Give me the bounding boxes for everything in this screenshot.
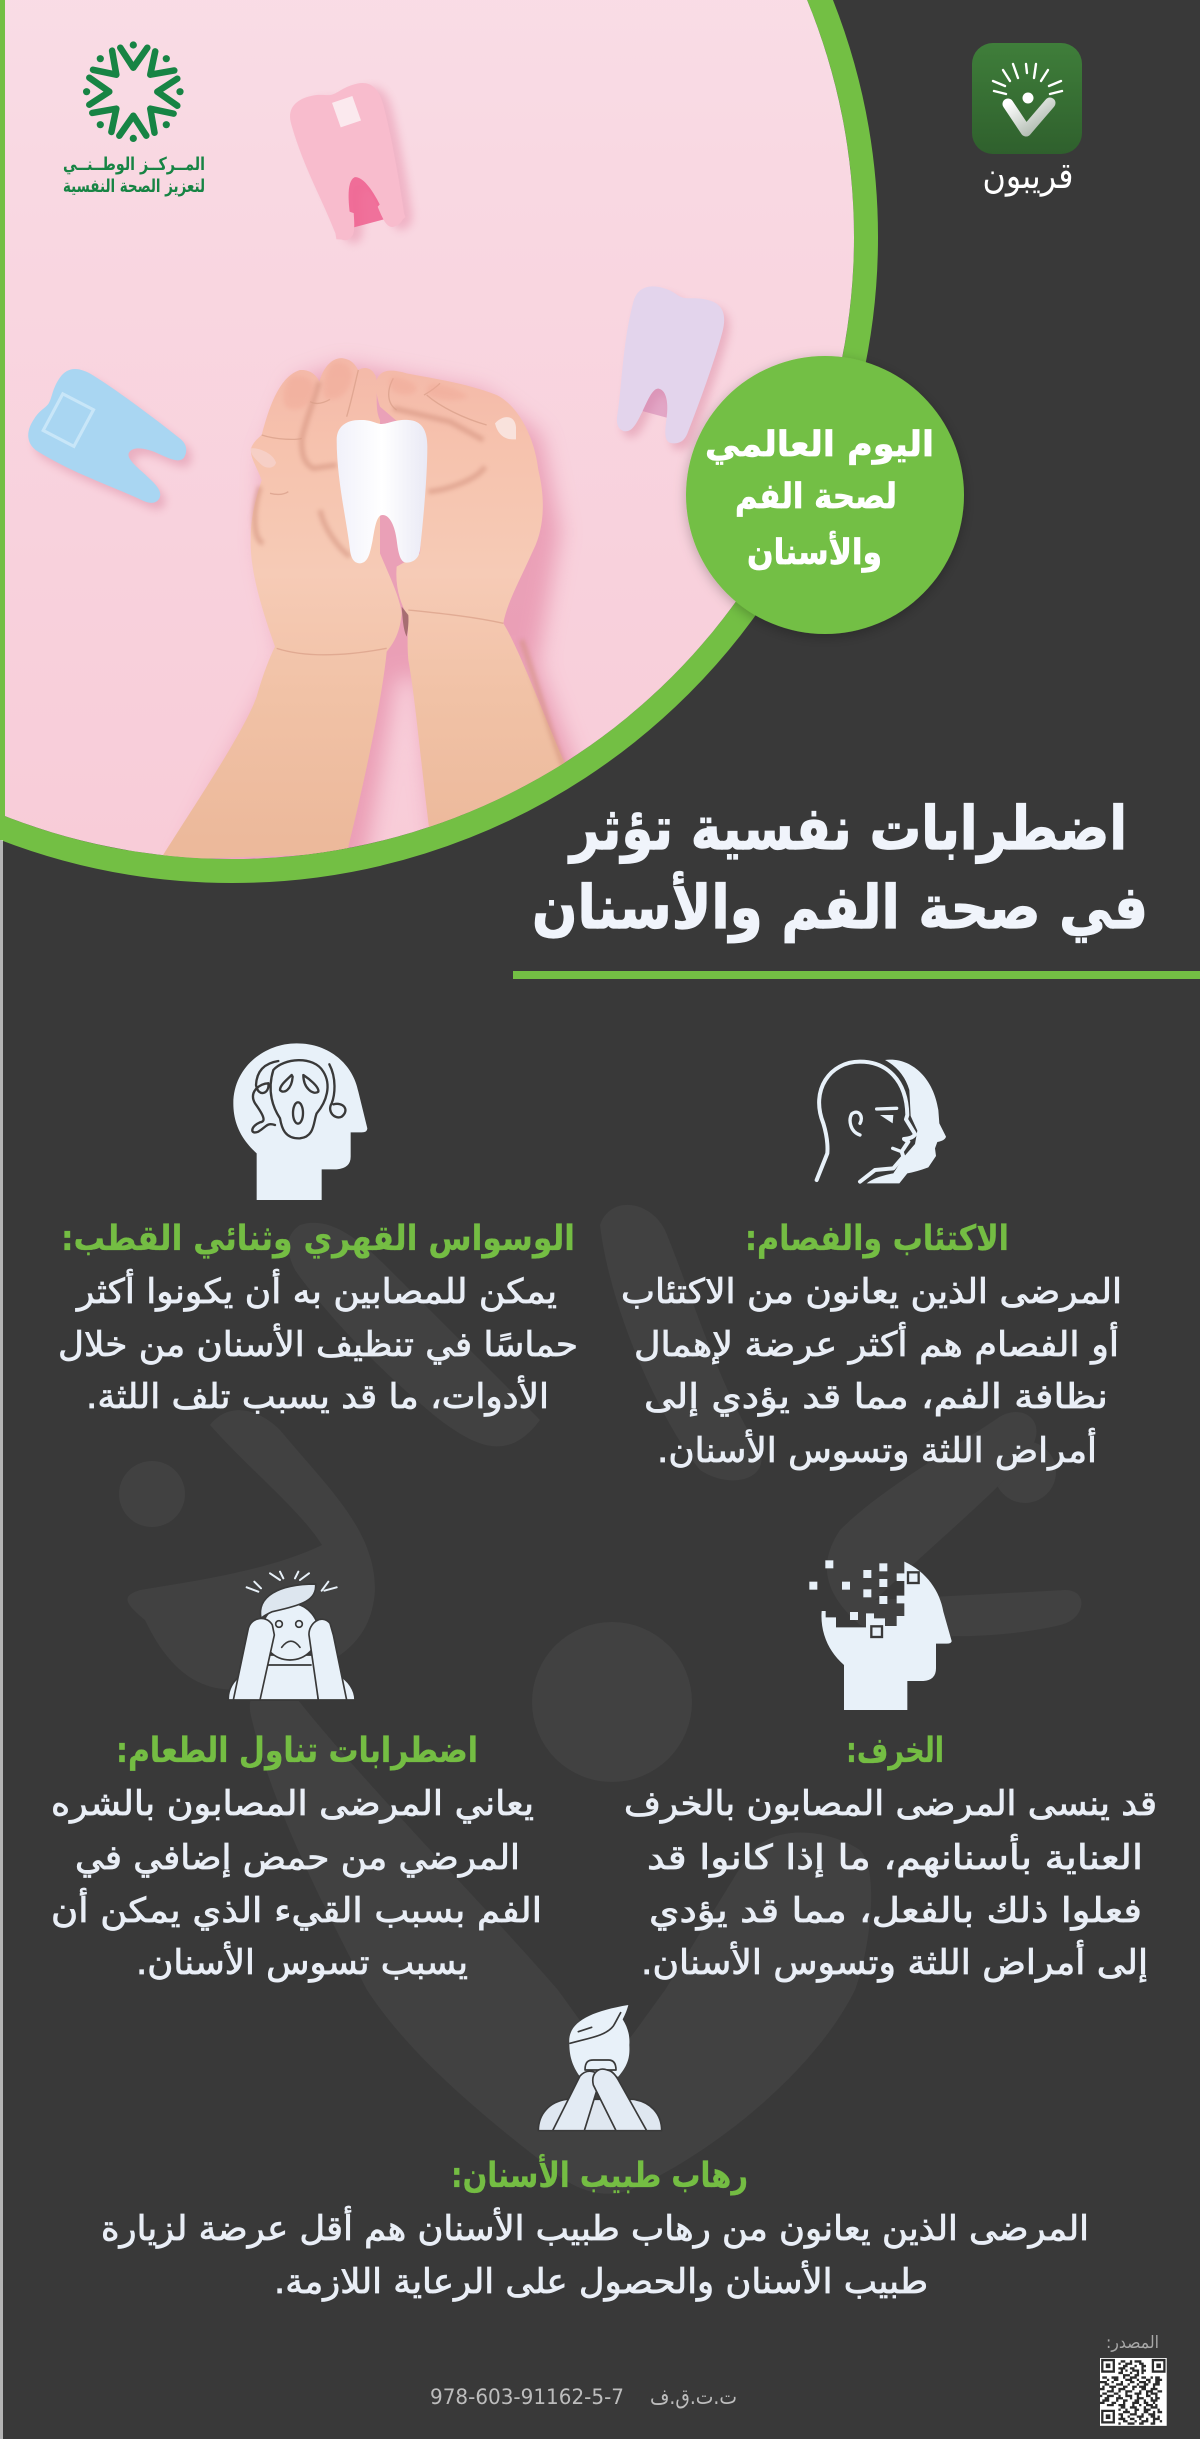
isbn: [430, 2385, 737, 2409]
badge: world day: لصحة الفم: [735, 477, 897, 517]
text: dementia: العناية بأسنانهم، ما إذا كانوا قد: [647, 1834, 1143, 1878]
green ring: [0, 0, 866, 871]
app tile: [972, 43, 1082, 154]
left edge stripe: [0, 0, 5, 830]
soft shading: [255, 382, 567, 773]
text: ocd bipolar: حماسًا في تنظيف الأسنان من خلال: [58, 1323, 578, 1365]
text: depression: [621, 1272, 1122, 1471]
left thumbnail: [251, 448, 276, 468]
tooth: blue: [28, 369, 194, 512]
logo text: المــركــز الوطــنــي: [63, 154, 205, 175]
right hand and arm: [376, 370, 564, 827]
isbn: ت.ت.ق.ف: [650, 2385, 737, 2409]
hands holding tooth: [160, 358, 581, 865]
photo contents: [19, 77, 736, 865]
hand shadows: [177, 365, 581, 865]
left edge line: [0, 840, 3, 2439]
text: depression: أمراض اللثة وتسوس الأسنان.: [657, 1428, 1097, 1471]
heading: ocd bipolar: الوسواس القهري وثنائي القطب:: [61, 1219, 575, 1259]
text: dental phobia: [101, 2206, 1089, 2302]
text: depression: أو الفصام هم أكثر عرضة لإهمال: [634, 1322, 1119, 1365]
panel: photo with ring: [0, 0, 866, 871]
icon: pixel head: [809, 1560, 952, 1710]
pink photo background: [0, 0, 854, 859]
badge: world day: [686, 356, 964, 634]
text: dementia: فعلوا ذلك بالفعل، مما قد يؤدي: [649, 1891, 1142, 1931]
text: ocd bipolar: [58, 1269, 578, 1417]
text: dental phobia: المرضى الذين يعانون من رهاب طبيب الأسنان هم أقل عرضة لزيارة: [101, 2206, 1089, 2249]
text: eating disorders: [51, 1784, 542, 1983]
heading: eating disorders: اضطرابات تناول الطعام:: [116, 1731, 478, 1771]
icon: person covering face: [538, 2005, 662, 2131]
logo mark: [89, 48, 177, 136]
badge: world day: اليوم العالمي: [705, 425, 934, 465]
fingertip highlights: [286, 366, 461, 408]
tooth: lavender: [617, 286, 732, 452]
text: depression: نظافة الفم، مما قد يؤدي إلى: [644, 1377, 1108, 1417]
icon: head with scream face: [233, 1043, 367, 1200]
heading: depression: الاكتئاب والفصام:: [745, 1219, 1009, 1259]
tooth: pink: [290, 83, 416, 246]
logo: national center: لتعزيز الصحة النفسية: [63, 176, 205, 197]
text: dementia: قد ينسى المرضى المصابون بالخرف: [624, 1784, 1157, 1824]
logo: national center: [63, 41, 205, 197]
heading: dementia: الخرف:: [846, 1731, 944, 1771]
badge: world day: والأسنان: [747, 530, 882, 573]
source label: المصدر:: [1106, 2333, 1159, 2353]
right thumbnail: [495, 417, 516, 439]
text: dental phobia: طبيب الأسنان والحصول على الرعاية اللازمة.: [274, 2260, 928, 2302]
text: eating disorders: يسبب تسوس الأسنان.: [136, 1941, 468, 1983]
V mark: [1008, 103, 1050, 131]
text: ocd bipolar: الأدوات، ما قد يسبب تلف اللثة.: [86, 1375, 549, 1417]
title underline: [513, 971, 1200, 979]
qr code: [1100, 2358, 1167, 2426]
title: [532, 794, 1148, 943]
text: eating disorders: المرضي من حمض إضافي في: [75, 1838, 520, 1878]
icon: two faces: [817, 1060, 946, 1183]
logo: qareeboon app: [972, 43, 1082, 197]
rays: [993, 64, 1062, 94]
text: depression: المرضى الذين يعانون من الاكتئاب: [621, 1272, 1122, 1312]
heading: dental phobia: رهاب طبيب الأسنان:: [451, 2153, 748, 2196]
icon: stressed person: [228, 1572, 355, 1700]
finger lines: [262, 370, 503, 655]
left hand and arm: [160, 358, 402, 860]
app name: قريبون: [982, 156, 1074, 197]
text: dementia: [624, 1784, 1157, 1983]
text: eating disorders: يعاني المرضى المصابون بالشره: [51, 1784, 534, 1824]
tooth: white: [337, 420, 427, 563]
text: dementia: إلى أمراض اللثة وتسوس الأسنان.: [641, 1940, 1148, 1983]
isbn: 978-603-91162-5-7: [430, 2385, 624, 2409]
watermark logo: [119, 1205, 1081, 2194]
text: ocd bipolar: يمكن للمصابين به أن يكونوا أكثر: [75, 1269, 557, 1312]
text: eating disorders: الفم بسبب القيء الذي يمكن أن: [51, 1888, 542, 1931]
valley between hands: [402, 607, 408, 637]
